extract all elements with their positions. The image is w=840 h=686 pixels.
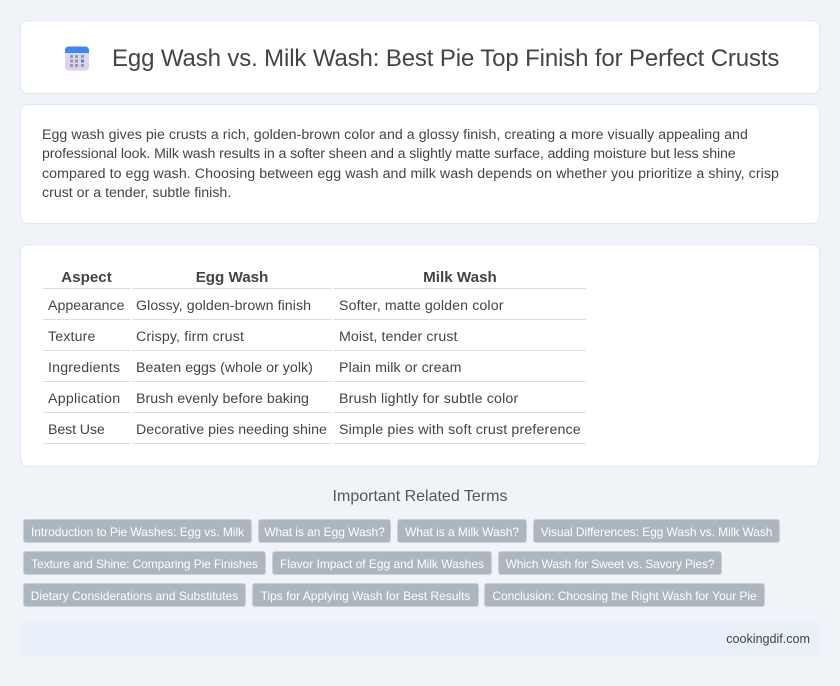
panel: comparison table — [20, 244, 820, 467]
related term tags: Texture and Shine: Comparing Pie Finishes — [31, 557, 258, 571]
panel: summary text — [20, 104, 820, 224]
table header: Milk Wash — [423, 269, 497, 286]
table header: Egg Wash — [196, 269, 268, 286]
row: best use — [48, 422, 581, 438]
footer source text: cookingdif.com — [726, 632, 810, 646]
row: ingredients: Plain milk or cream — [339, 360, 462, 376]
panel: summary text: crust or a tender, subtle finish. — [42, 185, 231, 201]
row: texture: Moist, tender crust — [339, 329, 458, 345]
panel: summary text: professional look. Milk wash results in a softer sheen and a slightly matte surface, adding moisture but less shine — [42, 146, 736, 162]
row: best use: Simple pies with soft crust preference — [339, 422, 581, 438]
row: ingredients: Beaten eggs (whole or yolk) — [136, 360, 313, 376]
row: appearance: Appearance — [48, 298, 125, 314]
heading: related terms: Important Related Terms — [333, 488, 507, 505]
row: appearance — [48, 298, 504, 314]
table header — [61, 269, 497, 286]
row: texture: Crispy, firm crust — [136, 329, 244, 345]
related term tags: What is an Egg Wash? — [264, 525, 385, 539]
related term tags: Tips for Applying Wash for Best Results — [261, 589, 470, 603]
row: texture — [48, 329, 458, 345]
related term tags: Conclusion: Choosing the Right Wash for Your Pie — [492, 589, 757, 603]
related term tags: Visual Differences: Egg Wash vs. Milk Wash — [541, 525, 772, 539]
header panel — [20, 20, 820, 94]
row: appearance: Softer, matte golden color — [339, 298, 504, 314]
panel: summary text: compared to egg wash. Choosing between egg wash and milk wash depends on whether you prioritize a shiny, crisp — [42, 166, 779, 182]
row: texture: Texture — [48, 329, 96, 345]
row: application: Brush evenly before baking — [136, 391, 309, 407]
row: appearance: Glossy, golden-brown finish — [136, 298, 311, 314]
related term tags: Flavor Impact of Egg and Milk Washes — [280, 557, 484, 571]
row: application — [48, 391, 518, 407]
panel: summary text: Egg wash gives pie crusts a rich, golden-brown color and a glossy finish, creating a more visually appealing and — [42, 127, 748, 143]
related term tags — [23, 519, 780, 607]
row: ingredients: Ingredients — [48, 360, 120, 376]
footer bar — [20, 622, 820, 656]
table header: Aspect — [61, 269, 112, 286]
row: application: Brush lightly for subtle color — [339, 391, 518, 407]
title: Egg Wash vs. Milk Wash: Best Pie Top Finish for Perfect Crusts — [112, 45, 779, 72]
related term tags: Which Wash for Sweet vs. Savory Pies? — [506, 557, 714, 571]
row: application: Application — [48, 391, 120, 407]
row: best use: Best Use — [48, 422, 105, 438]
row: ingredients — [48, 360, 462, 376]
related term tags: What is a Milk Wash? — [405, 525, 519, 539]
row: best use: Decorative pies needing shine — [136, 422, 327, 438]
related term tags: Introduction to Pie Washes: Egg vs. Milk — [31, 525, 244, 539]
icon: calendar — [65, 46, 89, 70]
related term tags: Dietary Considerations and Substitutes — [31, 589, 238, 603]
